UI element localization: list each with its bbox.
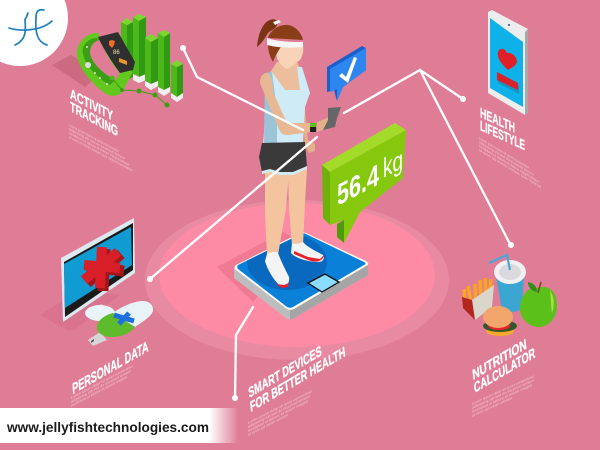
food group xyxy=(462,255,557,336)
far arm and hand xyxy=(302,100,315,153)
hair xyxy=(268,25,303,62)
text: nutrition body: Lorem ipsum dolor sit amet consectetur xyxy=(472,374,535,406)
usb drive xyxy=(88,301,153,346)
message bubble with check xyxy=(327,46,366,101)
legs xyxy=(265,168,307,255)
heading: health lifestyle: LIFESTYLE xyxy=(480,119,525,154)
text: nutrition body: ut enim ad minim veniam xyxy=(472,396,512,418)
heading: health lifestyle xyxy=(480,106,525,154)
text: nutrition body: adipiscing elit sed do eiusmod tempor xyxy=(472,378,535,410)
text: health body: ut enim ad minim veniam quis nostrud xyxy=(479,147,541,189)
website footer: www.jellyfishtechnologies.com xyxy=(6,420,209,435)
text: activity body: Lorem ipsum dolor sit amet consectetur xyxy=(69,123,120,154)
connector lines xyxy=(147,45,514,401)
platform ellipses xyxy=(145,200,449,360)
text: health body: incididunt ut labore et dolore magna aliqua xyxy=(479,143,540,184)
line end dots xyxy=(147,45,514,401)
watch xyxy=(310,123,316,132)
heading: smart devices: SMART DEVICES xyxy=(248,343,322,402)
logo xyxy=(0,0,68,66)
heading: smart devices: FOR BETTER HEALTH xyxy=(249,344,346,416)
scale xyxy=(217,232,368,320)
fitness band: 86 xyxy=(113,50,120,56)
heading: personal data: PERSONAL DATA xyxy=(71,339,150,398)
heading: nutrition calculator: NUTRITION xyxy=(472,336,527,384)
near arm xyxy=(260,73,312,135)
text: nutrition body: incididunt ut labore et dolore magna xyxy=(472,383,533,414)
text: health body: adipiscing elit sed do eiusmod tempor xyxy=(479,139,535,177)
website footer xyxy=(0,408,238,443)
text: personal body: incididunt ut labore et dolore magna xyxy=(71,375,128,408)
text: personal body: Lorem ipsum dolor sit amet consectetur xyxy=(71,364,134,400)
weight speech bubble: kg xyxy=(383,144,403,185)
heading: smart devices xyxy=(248,330,346,416)
phone: health lifestyle xyxy=(488,10,528,115)
heading: health lifestyle: HEALTH xyxy=(480,106,515,137)
text: activity body: adipiscing elit sed do eiusmod tempor xyxy=(69,127,126,161)
neck and chest xyxy=(269,62,307,104)
burger xyxy=(483,306,517,336)
weight speech bubble: 56.4 xyxy=(337,157,379,213)
ponytail xyxy=(257,19,277,47)
text: activity body: ut enim ad minim veniam quis nostrud exercitation xyxy=(69,135,133,173)
person xyxy=(257,19,341,288)
text: smart devices body: incididunt ut labore et dolore magna xyxy=(248,399,309,433)
headband xyxy=(267,38,303,48)
weight speech bubble xyxy=(322,123,406,243)
hand phone xyxy=(323,107,341,130)
face xyxy=(274,45,303,69)
tank top xyxy=(263,67,310,145)
text: health body: Lorem ipsum dolor sit amet consectetur xyxy=(479,135,530,170)
activity bars xyxy=(121,14,183,102)
monitor xyxy=(40,218,135,330)
heading: nutrition calculator xyxy=(472,332,536,397)
drink cup xyxy=(489,255,526,312)
fitness band xyxy=(52,32,170,108)
text: smart devices body: Lorem ipsum dolor sit amet consectetur xyxy=(248,389,313,425)
text: personal body: adipiscing elit sed do eiusmod tempor xyxy=(71,369,132,404)
fries xyxy=(462,278,494,320)
apple xyxy=(520,282,557,327)
text: smart devices body: ut enim ad minim veniam xyxy=(248,413,288,437)
shoes xyxy=(265,242,324,287)
heading: nutrition calculator: CALCULATOR xyxy=(473,345,536,397)
text: activity body: incididunt ut labore et dolore magna aliqua xyxy=(69,131,130,167)
heading: activity tracking: TRACKING xyxy=(70,99,118,140)
heading: activity tracking: ACTIVITY xyxy=(70,86,113,125)
text: smart devices body: adipiscing elit sed do eiusmod tempor xyxy=(248,394,311,429)
shorts xyxy=(259,142,307,173)
hand xyxy=(317,117,337,132)
